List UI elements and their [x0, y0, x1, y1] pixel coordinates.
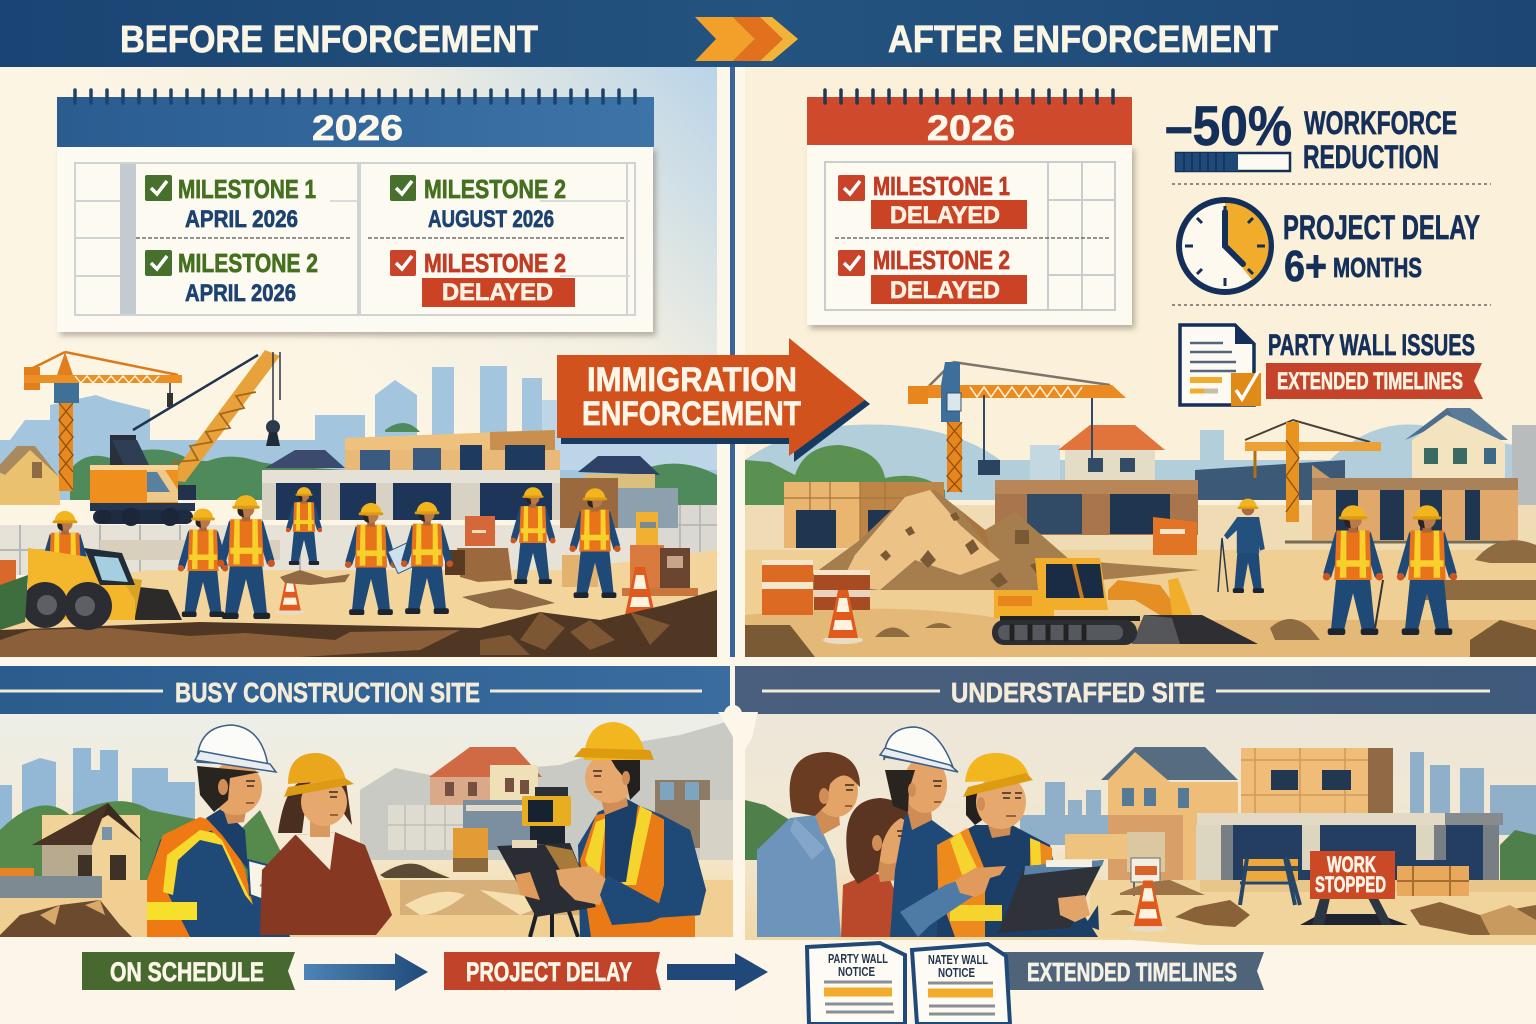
- dirt pile: [805, 490, 1200, 590]
- hills and skyline: [745, 424, 1536, 500]
- milestone 2 delayed: DELAYED: [442, 279, 553, 306]
- milestone 1 delayed: DELAYED: [890, 202, 1000, 229]
- milestone 2 august: MILESTONE 2: [424, 174, 566, 204]
- title: after enforcement: AFTER ENFORCEMENT: [888, 19, 1278, 61]
- stat: workforce reduction: [1165, 94, 1457, 175]
- scene: busy construction site: [0, 350, 717, 657]
- milestone 2 delayed: MILESTONE 2: [873, 245, 1010, 275]
- trees: [0, 795, 450, 880]
- band: busy construction site: [0, 666, 730, 714]
- icon: document with check: [1180, 325, 1261, 406]
- brown building: [995, 480, 1198, 535]
- cone: [620, 567, 660, 621]
- white divider in lower section: [718, 705, 758, 938]
- calendar grid: [825, 162, 1115, 310]
- stat: party wall issues: [1180, 325, 1483, 406]
- panel: after enforcement background: [745, 67, 1536, 657]
- cone small: [276, 576, 304, 615]
- milestone 1 delayed: MILESTONE 1: [873, 171, 1010, 201]
- document: party wall notice: [807, 943, 905, 1024]
- trees: [745, 800, 1536, 880]
- calendar year: 2026: [312, 109, 403, 148]
- document: second notice: [912, 944, 1010, 1024]
- label: extended timelines: [1000, 952, 1264, 990]
- stat: project delay clock: 6+: [1284, 242, 1327, 291]
- skyline: [0, 366, 717, 500]
- milestone 2 august: [390, 174, 566, 233]
- clipboard: [998, 860, 1104, 933]
- scene: understaffed site: [745, 362, 1536, 657]
- panel: left calendar: [57, 90, 654, 332]
- center divider: [717, 67, 745, 666]
- background house left: [0, 446, 60, 505]
- barricade: [1240, 858, 1300, 905]
- milestone 2 delayed: DELAYED: [890, 277, 1000, 304]
- calendar binding rings: [825, 90, 1113, 103]
- tripod: [530, 900, 578, 937]
- ground: [0, 880, 733, 937]
- materials stack and cone: [562, 512, 698, 596]
- milestone 2 april: MILESTONE 2: [178, 248, 318, 278]
- stat: project delay clock: MONTHS: [1333, 252, 1422, 283]
- icon: header chevrons: [695, 17, 798, 61]
- worker on loader: [39, 511, 91, 623]
- label: on schedule: ON SCHEDULE: [110, 957, 264, 987]
- second crane: [1245, 420, 1381, 522]
- excavator: [992, 558, 1258, 645]
- surveying camera: [522, 787, 571, 844]
- milestone 1 april: MILESTONE 1: [178, 174, 316, 204]
- two workers standing: [1323, 505, 1457, 635]
- skyline: [0, 748, 195, 835]
- document: party wall notice: PARTY WALL: [828, 951, 888, 966]
- work stopped sign: WORK: [1327, 852, 1376, 877]
- back house: [1058, 425, 1165, 482]
- panel: before enforcement background: [0, 67, 717, 657]
- person: man white helmet pointing: [880, 727, 960, 937]
- label: project delay: [444, 952, 661, 990]
- person: woman with yellow helmet: [260, 753, 392, 935]
- brick block: [1241, 748, 1393, 813]
- calendar year: 2026: [927, 109, 1015, 148]
- stat: party wall issues: EXTENDED TIMELINES: [1277, 368, 1463, 395]
- band: busy construction site: BUSY CONSTRUCTION SITE: [175, 677, 480, 708]
- tower crane: [24, 352, 182, 491]
- small dirt mounds: [875, 540, 1536, 640]
- worker group: [178, 487, 621, 619]
- rubble: [0, 900, 132, 937]
- lower strip white: [0, 657, 1536, 666]
- arrow: immigration enforcement: ENFORCEMENT: [582, 395, 801, 433]
- scene: consultation after: [745, 714, 1536, 945]
- person: worker with clipboard: [900, 753, 1104, 937]
- title: before enforcement: BEFORE ENFORCEMENT: [120, 19, 538, 61]
- milestone 2 delayed: [838, 245, 1027, 304]
- concrete building: [1196, 813, 1503, 885]
- small mound: [1120, 880, 1205, 895]
- pointing arm: [900, 866, 1006, 937]
- skyline: [1020, 752, 1536, 845]
- milestone 1 april: APRIL 2026: [185, 206, 298, 233]
- fence: [0, 505, 717, 575]
- arrow: immigration enforcement: [557, 338, 870, 462]
- person: man in blue shirt: [757, 752, 860, 937]
- document in hand: [248, 860, 316, 915]
- brick structure: [784, 482, 944, 548]
- person: woman in red top: [841, 798, 915, 937]
- band: understaffed site: [735, 666, 1536, 714]
- person: surveyor with camera and clipboard: [497, 722, 706, 937]
- clipboard: [497, 840, 596, 917]
- cone: [1129, 880, 1167, 932]
- arrow: delay to notice: [667, 953, 768, 991]
- tower crane: [908, 362, 1126, 492]
- document: party wall notice: NOTICE: [838, 964, 875, 979]
- right building: [1285, 465, 1518, 542]
- work stopped sign: [1300, 851, 1408, 925]
- stat: workforce reduction: –50%: [1165, 94, 1292, 157]
- label: project delay: PROJECT DELAY: [466, 957, 632, 987]
- orange sign: [1153, 517, 1197, 555]
- trees: [70, 423, 717, 510]
- ground: [745, 550, 1536, 657]
- document: second notice: NATEY WALL: [928, 952, 988, 967]
- icon: clock: [1179, 200, 1271, 292]
- person: engineer with white helmet: [147, 725, 316, 937]
- crate and table: [445, 516, 512, 582]
- milestone 2 august: AUGUST 2026: [428, 206, 554, 233]
- milestone 2 delayed: MILESTONE 2: [424, 248, 566, 278]
- worker with surveying pole: [1218, 499, 1265, 593]
- milestone 2 april: [145, 248, 318, 307]
- stat: project delay clock: [1179, 200, 1480, 292]
- document: second notice: NOTICE: [938, 965, 975, 980]
- loader: [0, 548, 182, 630]
- panel: right calendar: [807, 90, 1132, 325]
- milestone 2 delayed: [390, 248, 575, 307]
- scene: consultation before: [0, 714, 733, 937]
- barrels: [762, 560, 870, 615]
- back house: [380, 747, 733, 878]
- milestone 1 april: [145, 174, 316, 233]
- header bar: [0, 0, 1536, 67]
- work stopped sign: STOPPED: [1315, 872, 1386, 897]
- fence: [745, 505, 1536, 550]
- calendar binding rings: [75, 90, 635, 103]
- arrow: schedule to delay: [304, 953, 428, 991]
- calendar grid: [75, 163, 635, 315]
- mobile crane: [90, 350, 280, 526]
- grey hills: [360, 720, 733, 860]
- dirt mounds on site: [280, 570, 555, 610]
- milestone 2 april: APRIL 2026: [185, 280, 296, 307]
- stat: workforce reduction: REDUCTION: [1303, 139, 1439, 175]
- milestone 1 delayed: [838, 171, 1027, 229]
- label: on schedule: [82, 952, 295, 990]
- dirt foreground: [0, 590, 717, 657]
- cone: [823, 590, 863, 644]
- stacked bricks: [1397, 866, 1469, 896]
- building under construction: [262, 430, 678, 528]
- rubble piles: [1110, 900, 1536, 935]
- house: [1065, 747, 1238, 880]
- arrow: immigration enforcement: IMMIGRATION: [587, 361, 797, 399]
- left house: [0, 803, 143, 898]
- label: extended timelines: EXTENDED TIMELINES: [1027, 957, 1237, 987]
- footer background: [0, 937, 733, 1024]
- ground: [0, 550, 717, 640]
- house right: [1405, 408, 1508, 480]
- ground: [1090, 880, 1536, 945]
- trees: [745, 445, 945, 510]
- small notice post: [1131, 858, 1160, 896]
- stat: workforce reduction: WORKFORCE: [1304, 105, 1457, 141]
- band: understaffed site: UNDERSTAFFED SITE: [951, 677, 1205, 708]
